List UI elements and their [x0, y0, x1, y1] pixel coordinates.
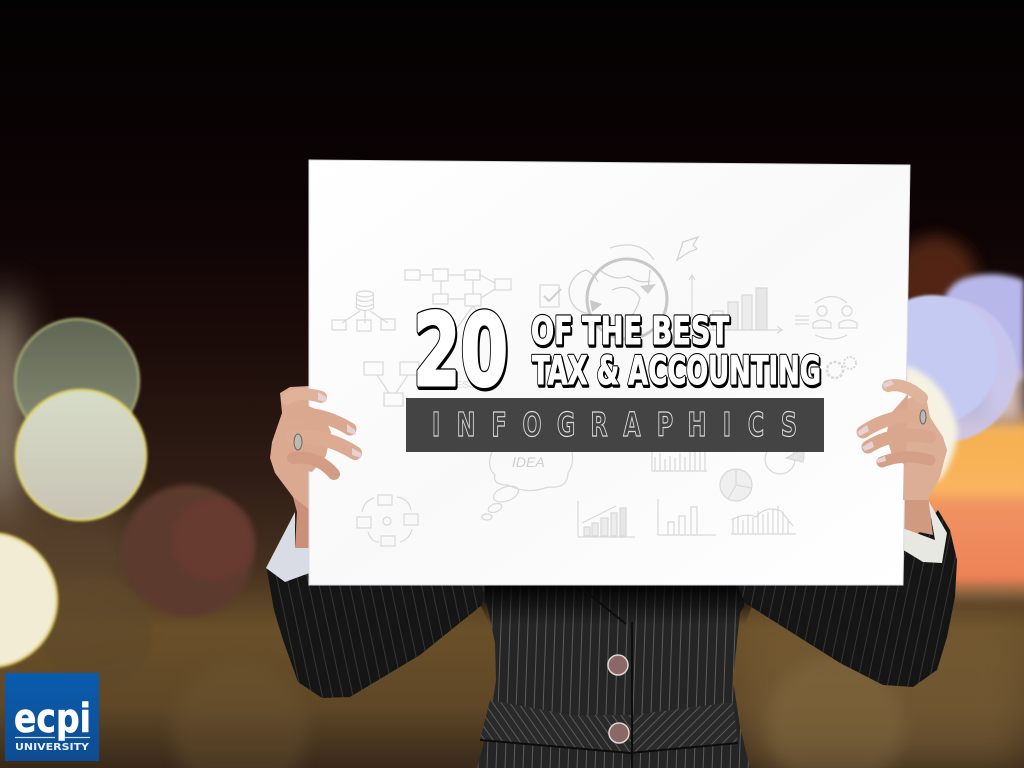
banner: infographics: [406, 398, 824, 452]
banner: infographics: H: [688, 406, 706, 444]
doodle: bar chart bottom two: [658, 499, 716, 535]
doodle: business plan label: BUSINESS: [425, 380, 476, 391]
banner: infographics: C: [748, 406, 764, 444]
jacket torso: [470, 580, 760, 768]
banner: infographics: O: [522, 406, 542, 444]
title line: of the best: OF THE BEST: [531, 309, 729, 353]
title line: of the best: OF THE BEST: [531, 309, 729, 353]
jacket lapel and front seam: [480, 587, 738, 768]
doodle: globe and clouds: [569, 245, 667, 339]
doodle: database tree: [332, 291, 395, 331]
right hand over board: [857, 380, 947, 500]
right hand ring: [920, 410, 926, 424]
right shirt cuff: [900, 500, 947, 563]
doodle: flow chart: [405, 269, 511, 328]
white board: [309, 160, 910, 585]
title line: tax and accounting: TAX & ACCOUNTING: [532, 349, 821, 394]
title number: 20: 20: [413, 292, 508, 409]
doodle: pie chart small: [765, 444, 804, 474]
logo: ECPI University: UNIVERSITY: [15, 742, 90, 753]
jacket shaded top: [470, 584, 760, 625]
left shirt cuff: [266, 512, 312, 582]
doodle: pointer arrow: [677, 237, 698, 260]
title number: 20: 20: [413, 292, 508, 409]
doodle: idea cloud: [482, 452, 572, 520]
doodle: cycle lightbulb: [357, 495, 418, 546]
doodle: bar chart bottom one: [578, 501, 635, 537]
title line: tax and accounting: TAX & ACCOUNTING: [533, 351, 822, 396]
banner: infographics: I: [432, 406, 440, 444]
left wrist: [293, 470, 312, 548]
jacket button upper: [608, 655, 628, 675]
doodle: gears: [827, 357, 856, 378]
jacket belt left: [480, 700, 633, 753]
left hand behind board: [270, 386, 310, 510]
banner: infographics: N: [457, 406, 475, 444]
doodle: checkbox: [540, 285, 561, 307]
doodle: idea cloud: IDEA: [512, 454, 545, 470]
banner: infographics: P: [657, 406, 673, 444]
fingers of left hand over board: [287, 392, 361, 474]
banner: infographics: G: [557, 406, 575, 444]
title line: of the best: OF THE BEST: [532, 311, 730, 355]
doodle: business plan tree: [364, 362, 419, 406]
right arm sleeve: [735, 510, 957, 687]
doodle: area chart: [652, 441, 707, 471]
banner: infographics: A: [623, 406, 641, 444]
doodle: pie chart large: [720, 469, 752, 501]
right wrist: [900, 470, 933, 535]
doodle: bar chart top right: [689, 275, 782, 333]
bokeh: left glow lights: [0, 292, 308, 768]
jacket belt right: [630, 702, 738, 753]
doodle: line bars bottom three: [731, 506, 796, 534]
banner: infographics: R: [590, 406, 608, 444]
jacket button lower: [609, 723, 629, 743]
logo: ECPI University: ecpi: [14, 696, 91, 742]
title line: tax and accounting: TAX & ACCOUNTING: [532, 349, 821, 394]
banner: infographics: I: [723, 406, 731, 444]
title number: 20: [413, 292, 509, 411]
title line: of the best: [531, 309, 730, 355]
left hand fingernails: [318, 392, 361, 458]
doodle: people cycle: [795, 296, 857, 339]
bokeh: right glow lights: [745, 236, 1024, 768]
right hand fingernails: [857, 380, 894, 463]
title line: tax and accounting: [532, 349, 822, 396]
title number: 20: 20: [414, 294, 509, 411]
banner: infographics: F: [491, 406, 507, 444]
board sketches: business doodles: [332, 237, 857, 546]
logo: ECPI University: [5, 673, 99, 761]
left hand ring: [294, 434, 302, 450]
left arm sleeve: [267, 512, 486, 698]
banner: infographics: S: [781, 406, 797, 444]
